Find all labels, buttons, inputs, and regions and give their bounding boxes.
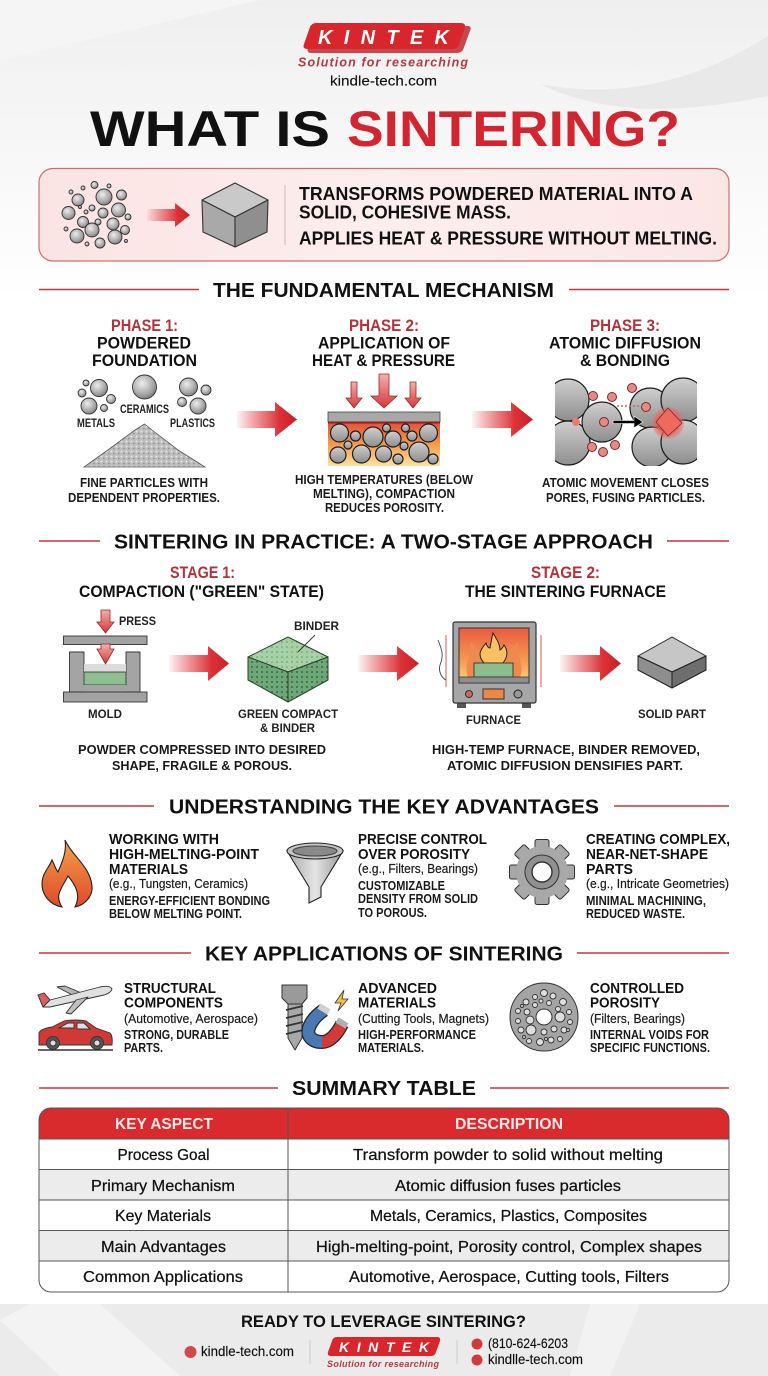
icon: furnace [438,622,541,727]
footer logo: KINTEK [339,1339,430,1355]
advantage text: DENSITY FROM SOLID [358,891,478,906]
icon: green compact cube: BINDER [294,621,340,633]
phase 3 heading [549,317,701,370]
panel: advanced materials [282,980,489,1055]
definition text: APPLIES HEAT & PRESSURE WITHOUT MELTING. [299,228,717,248]
advantage text [358,831,487,920]
application text [358,980,489,1055]
logo: Kintek: Solution for researching [298,56,468,70]
summary table [39,1108,729,1292]
advantage text: WORKING WITH [109,831,219,848]
panel: controlled porosity [510,980,710,1055]
arrow: powder to solid [147,203,190,227]
phase 3 heading: ATOMIC DIFFUSION [549,334,701,352]
application text: COMPONENTS [124,994,223,1012]
icon: material particles [77,375,215,430]
phase 3 description [542,475,709,505]
icon: flame [42,840,92,907]
panel: phase 1 [68,317,220,505]
icon: airplane [38,986,112,1014]
phase 3 description: PORES, FUSING PARTICLES. [546,490,705,505]
panel: phase 2 [295,317,474,515]
definition text: TRANSFORMS POWDERED MATERIAL INTO A [299,183,693,204]
panel: high-melting-point materials [42,831,270,921]
advantage text: REDUCED WASTE. [586,906,685,921]
panel: complex near-net-shape parts [510,831,730,921]
footer logo: Solution for researching [327,1359,440,1369]
phase 2 heading: APPLICATION OF [318,334,450,352]
arrow: mold to green compact [169,646,229,681]
footer [0,1304,768,1376]
advantage text: PRECISE CONTROL [358,831,487,848]
advantage text: (e.g., Filters, Bearings) [358,861,478,876]
phase 1 heading: PHASE 1: [111,317,178,335]
row: common applications: Automotive, Aerospace, Cutting tools, Filters [349,1269,669,1286]
icon: green compact cube: & BINDER [260,723,316,735]
icon: funnel [287,843,343,903]
arrow: furnace to solid part [560,646,621,681]
phase 1 heading [92,317,197,370]
application text: (Automotive, Aerospace) [124,1011,258,1026]
stage 2 description: ATOMIC DIFFUSION DENSIFIES PART. [447,758,683,773]
panel: control over porosity [287,831,487,920]
stage 2 heading: THE SINTERING FURNACE [465,583,666,601]
advantage text: ENERGY-EFFICIENT BONDING [109,893,270,908]
phase 1 description: DEPENDENT PROPERTIES. [68,490,220,505]
row: primary mechanism: Atomic diffusion fuses particles [395,1178,621,1195]
application text: MATERIALS [358,994,436,1012]
heading: sintering in practice: SINTERING IN PRACTICE: A TWO-STAGE APPROACH [114,530,653,554]
row: process goal: Transform powder to solid without melting [353,1147,663,1164]
row: main advantages: High-melting-point, Porosity control, Complex shapes [316,1239,702,1256]
stage 2 heading [465,564,666,601]
website contact: kindle-tech.com [201,1343,294,1359]
advantage text: CUSTOMIZABLE [358,878,445,893]
email contact: kindlle-tech.com [488,1351,583,1367]
advantage text: MATERIALS [109,861,188,878]
phase 2 description: HIGH TEMPERATURES (BELOW [295,472,474,487]
phase 1 heading: POWDERED [97,334,191,352]
advantage text: PARTS [586,861,633,878]
advantage text [109,831,270,921]
icon: solid cube [202,183,268,247]
advantage text: BELOW MELTING POINT. [109,906,242,921]
advantage text: MINIMAL MACHINING, [586,893,706,908]
icon: material particles: PLASTICS [170,418,215,430]
arrow: phase 2 to phase 3 [472,402,533,437]
icon: powder pile [84,424,205,467]
panel: stage 1 [64,564,340,773]
definition text: SOLID, COHESIVE MASS. [299,202,511,222]
row: primary mechanism [91,1178,621,1195]
icon: magnet [308,1006,347,1042]
stage 1 description: SHAPE, FRAGILE & POROUS. [112,758,292,773]
application text [124,980,258,1055]
table header: KEY ASPECT [115,1116,214,1133]
row: key materials [115,1208,647,1225]
icon: solid part: SOLID PART [638,709,706,721]
phase 3 heading: PHASE 3: [590,317,660,335]
icon: press and mold [64,610,156,721]
phase 2 heading: PHASE 2: [349,317,419,335]
stage 1 description: POWDER COMPRESSED INTO DESIRED [78,742,326,757]
definition text [299,183,717,248]
stage 1 heading: STAGE 1: [170,564,235,582]
application text: HIGH-PERFORMANCE [358,1027,476,1042]
website link: kindle-tech.com [330,72,437,88]
icon: loose powder particles [62,182,131,248]
advantage text: TO POROUS. [358,905,427,920]
icon: furnace: FURNACE [466,715,521,727]
phase 2 heading: HEAT & PRESSURE [312,352,455,370]
call to action: READY TO LEVERAGE SINTERING? [241,1313,526,1331]
application text: STRUCTURAL [124,980,216,997]
row: key materials: Key Materials [115,1208,211,1225]
table header [115,1116,563,1133]
application text: STRONG, DURABLE [124,1027,229,1042]
application text: PARTS. [124,1040,163,1055]
row: common applications [83,1269,669,1286]
phase 2 description: REDUCES POROSITY. [325,500,444,515]
heading: summary table: SUMMARY TABLE [292,1077,476,1100]
phase 3 description: ATOMIC MOVEMENT CLOSES [542,475,709,490]
heading: understanding the key advantages: UNDERSTANDING THE KEY ADVANTAGES [169,796,599,818]
row: main advantages: Main Advantages [101,1239,226,1256]
row: process goal [118,1147,663,1164]
application text: MATERIALS. [358,1040,424,1055]
icon: material particles: METALS [77,418,115,430]
application text: POROSITY [590,994,660,1012]
title: WHAT IS [90,101,330,157]
advantage text: CREATING COMPLEX, [586,831,730,848]
logo: Kintek [298,23,471,70]
application text: INTERNAL VOIDS FOR [590,1027,709,1042]
phase 1 description [68,475,220,505]
phone contact: (810-624-6203 [488,1335,568,1351]
row: common applications: Common Applications [83,1269,243,1286]
icon: screw [282,985,307,1050]
icon: solid part [638,637,706,721]
phase 3 heading: & BONDING [580,352,670,370]
logo: Kintek: KINTEK [318,27,451,49]
application text: SPECIFIC FUNCTIONS. [590,1040,710,1055]
icon: porous disc [510,983,578,1051]
panel: phase 3 [542,317,709,505]
panel: structural components [38,980,258,1055]
icon: gear [510,840,574,904]
icon: press and mold: MOLD [88,709,122,721]
advantage text: (e.g., Tungsten, Ceramics) [109,876,248,891]
arrow: green compact to furnace [358,646,419,681]
stage 2 description [432,742,700,773]
panel: stage 2 [432,564,706,773]
icon: car [38,1020,113,1050]
icon: heat and pressure chamber [328,374,440,466]
advantage text: HIGH-MELTING-POINT [109,846,259,863]
icon: press and mold: PRESS [119,616,156,628]
icon: lightning [335,990,348,1011]
phase 2 description: MELTING), COMPACTION [313,486,455,501]
arrow: phase 1 to phase 2 [237,402,297,437]
icon: green compact cube: GREEN COMPACT [238,709,338,721]
application text: ADVANCED [358,980,437,997]
row: process goal: Process Goal [118,1147,210,1164]
heading: the fundamental mechanism: THE FUNDAMENTAL MECHANISM [213,279,554,302]
title: SINTERING? [347,101,680,157]
phase 2 heading [312,317,455,370]
icon: atomic diffusion [555,377,697,466]
footer logo [327,1337,440,1369]
application text [590,980,710,1055]
stage 2 description: HIGH-TEMP FURNACE, BINDER REMOVED, [432,742,700,757]
application text: (Cutting Tools, Magnets) [358,1011,489,1026]
stage 1 heading [79,564,324,601]
application text: (Filters, Bearings) [590,1011,685,1026]
stage 1 description [78,742,326,773]
icon: material particles: CERAMICS [120,404,169,416]
table header: DESCRIPTION [455,1116,563,1133]
phase 1 heading: FOUNDATION [92,352,197,370]
application text: CONTROLLED [590,980,684,997]
row: key materials: Metals, Ceramics, Plastics, Composites [370,1208,647,1225]
stage 2 heading: STAGE 2: [531,564,600,582]
phase 2 description [295,472,474,515]
phase 1 description: FINE PARTICLES WITH [80,475,208,490]
row: main advantages [101,1239,702,1256]
row: primary mechanism: Primary Mechanism [91,1178,235,1195]
advantage text: (e.g., Intricate Geometries) [586,876,729,891]
panel: definition [39,168,729,261]
heading: key applications of sintering: KEY APPLICATIONS OF SINTERING [205,942,563,966]
advantage text [586,831,730,921]
advantage text: OVER POROSITY [358,846,470,863]
stage 1 heading: COMPACTION ("GREEN" STATE) [79,583,324,601]
title [90,101,680,157]
advantage text: NEAR-NET-SHAPE [586,846,708,863]
icon: green compact cube [238,621,340,735]
